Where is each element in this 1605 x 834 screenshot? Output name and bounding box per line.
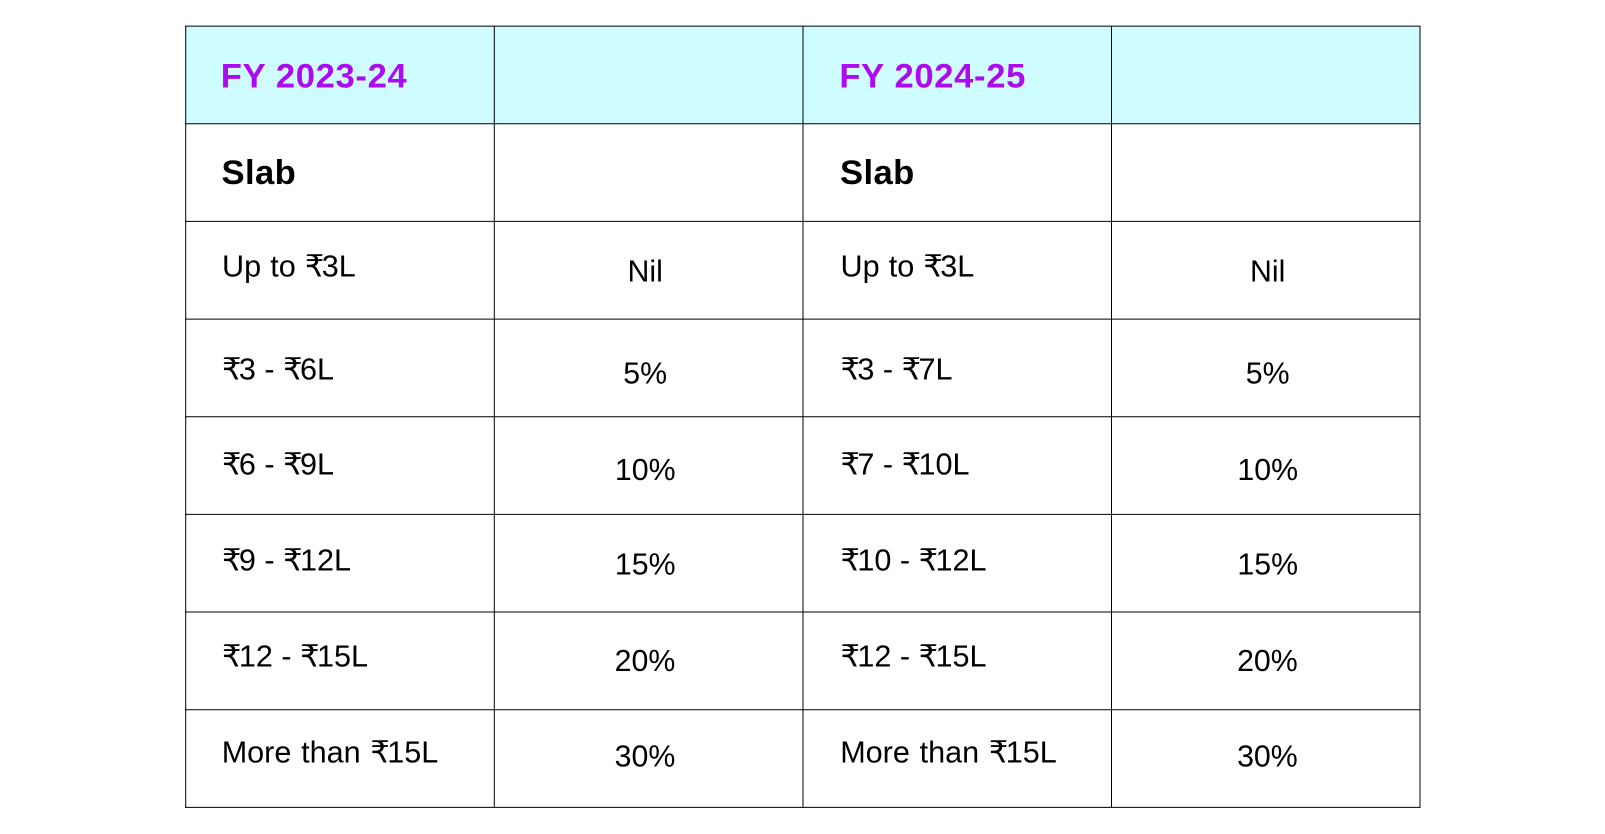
FY 2024-25 slab column: ₹10 - ₹12L — [840, 544, 987, 578]
FY 2023-24 rate column: Nil — [628, 255, 663, 288]
column label: Slab (FY 2023-24): Slab — [222, 154, 296, 192]
header row background — [186, 26, 1420, 124]
FY 2024-25 rate column: 15% — [1237, 549, 1298, 582]
FY 2024-25 rate column: 30% — [1237, 741, 1298, 774]
FY 2023-24 rate column — [615, 255, 676, 774]
heading: FY 2023-24: FY 2023-24 — [221, 58, 407, 96]
FY 2024-25 slab column: Up to ₹3L — [840, 249, 974, 283]
FY 2024-25 rate column: 20% — [1237, 645, 1298, 678]
FY 2023-24 slab column — [222, 249, 438, 770]
FY 2023-24 slab column: Up to ₹3L — [222, 249, 356, 283]
FY 2024-25 slab column — [840, 249, 1057, 770]
FY 2023-24 rate column: 15% — [615, 549, 676, 582]
column label: Slab (FY 2024-25): Slab — [840, 154, 915, 192]
FY 2023-24 slab column: ₹3 - ₹6L — [222, 352, 334, 386]
table grid lines — [185, 26, 1420, 808]
FY 2024-25 rate column: Nil — [1250, 255, 1285, 288]
FY 2024-25 slab column: ₹7 - ₹10L — [840, 447, 970, 481]
FY 2024-25 slab column: ₹3 - ₹7L — [840, 352, 952, 386]
FY 2023-24 rate column: 5% — [623, 357, 667, 390]
FY 2024-25 rate column — [1237, 255, 1298, 774]
heading: FY 2024-25: FY 2024-25 — [839, 58, 1026, 96]
FY 2023-24 rate column: 30% — [615, 741, 675, 774]
FY 2023-24 rate column: 20% — [615, 645, 675, 678]
FY 2024-25 slab column: ₹12 - ₹15L — [840, 640, 987, 674]
FY 2024-25 rate column: 10% — [1237, 454, 1298, 487]
FY 2023-24 rate column: 10% — [615, 454, 676, 487]
FY 2024-25 rate column: 5% — [1246, 357, 1290, 390]
FY 2023-24 slab column: ₹12 - ₹15L — [222, 640, 368, 674]
FY 2023-24 slab column: More than ₹15L — [222, 736, 438, 770]
FY 2023-24 slab column: ₹6 - ₹9L — [222, 447, 334, 481]
FY 2023-24 slab column: ₹9 - ₹12L — [222, 544, 351, 578]
FY 2024-25 slab column: More than ₹15L — [840, 736, 1057, 770]
